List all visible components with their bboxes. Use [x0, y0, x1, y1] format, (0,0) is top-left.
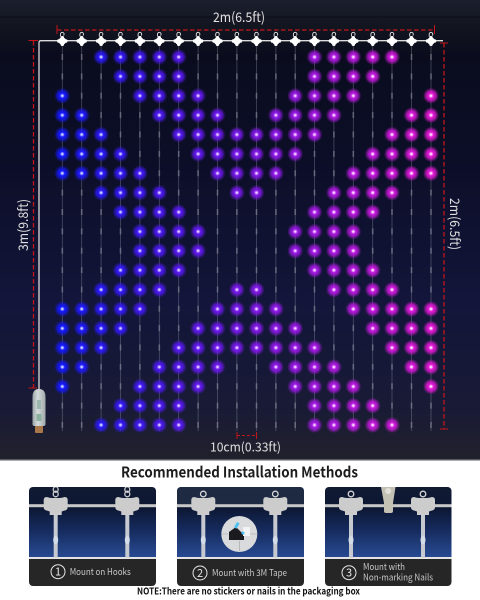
step 1 badge: 1 [55, 564, 61, 580]
heading: Recommended Installation Methods [121, 462, 358, 482]
dimension: top width [57, 25, 434, 34]
step 3 badge: 3 [346, 565, 352, 581]
icon: connectors with ring hooks [191, 491, 287, 558]
panel: mount on hooks [29, 487, 156, 586]
caption 3: Non-marking Nails [363, 570, 433, 584]
caption 3: Mount with [363, 559, 405, 573]
panel: mount with 3M tape [177, 487, 304, 586]
label: 2m width: 2m(6.5ft) [213, 6, 265, 26]
label: 3m height: 3m(9.8ft) [12, 199, 32, 251]
top rail and lead cable [39, 41, 443, 392]
panel: non-marking nails [325, 487, 452, 586]
step 2 badge: 2 [197, 565, 203, 581]
inset: 3M tape detail [221, 516, 257, 552]
dimension: LED spacing [237, 432, 256, 439]
icon: USB controller [32, 389, 46, 433]
label: spacing: 10cm(0.33ft) [210, 436, 281, 456]
caption 1: Mount on Hooks [70, 564, 131, 578]
icon: connectors with chain hooks [44, 487, 139, 558]
dimension: right height [440, 43, 448, 429]
string wires with unlit beads [62, 44, 431, 431]
packaging note: NOTE:There are no stickers or nails in the packaging box [137, 584, 361, 598]
dimension: left height [28, 40, 38, 388]
icon: connectors with nail [339, 487, 435, 558]
hook row [57, 32, 436, 46]
caption 2: Mount with 3M Tape [212, 565, 287, 579]
dark photo background [0, 0, 480, 460]
LED butterfly pattern [54, 49, 439, 433]
label: 2m height: 2m(6.5ft) [446, 198, 466, 250]
caption 3 [364, 562, 433, 583]
